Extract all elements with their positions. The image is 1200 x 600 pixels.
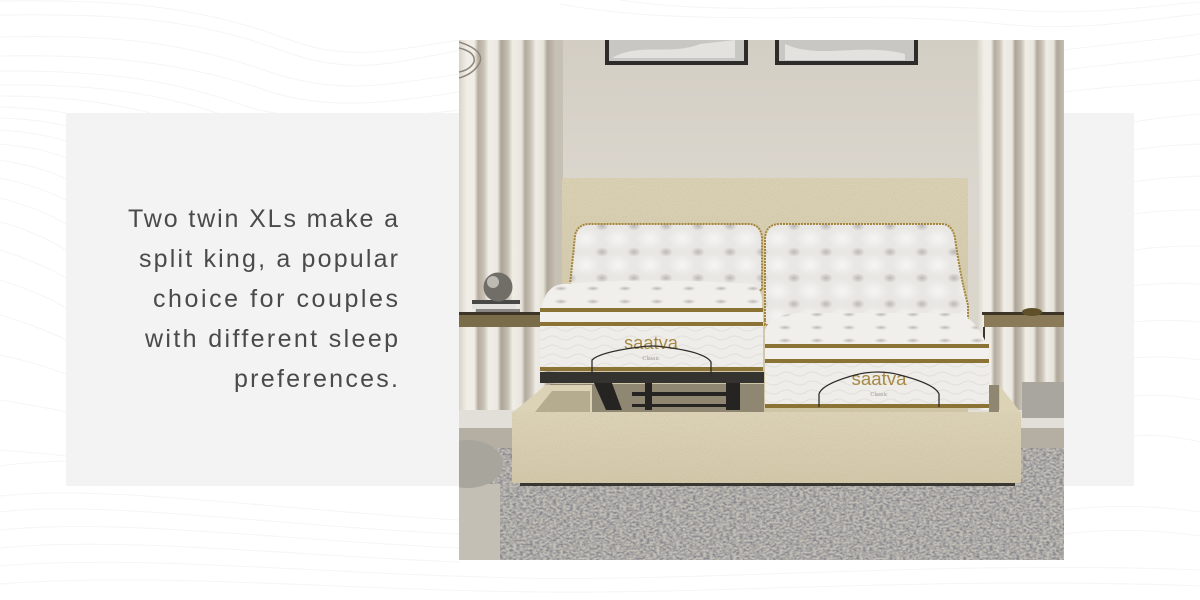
right mattress logo: saatva bbox=[852, 369, 908, 389]
right mattress handle bbox=[819, 372, 939, 407]
text block: split king caption: preferences. bbox=[234, 365, 398, 393]
text block: split king caption: choice for couples bbox=[153, 285, 398, 313]
wall bbox=[563, 40, 977, 410]
text block: split king caption: Two twin XLs make a bbox=[128, 205, 398, 233]
curtains bbox=[459, 40, 1064, 410]
left mattress bbox=[540, 224, 763, 376]
right mattress bbox=[765, 224, 989, 408]
framed pictures bbox=[605, 40, 918, 65]
right mattress body bbox=[765, 348, 985, 359]
text block: split king caption bbox=[128, 205, 398, 393]
bed frame bbox=[512, 385, 1021, 486]
text block: split king caption: split king, a popular bbox=[139, 245, 398, 273]
headboard bbox=[562, 178, 968, 420]
left mattress handle bbox=[592, 346, 711, 376]
left mattress raised head bbox=[570, 224, 762, 290]
baseboard and floor bbox=[459, 410, 1064, 450]
rug bbox=[459, 448, 1064, 560]
curtain tie detail bbox=[459, 42, 481, 78]
panel: grey text card bbox=[66, 113, 1134, 486]
photo: bedroom with split king adjustable bed bbox=[433, 40, 1064, 560]
left mattress: Classic bbox=[642, 356, 660, 362]
left mattress body bbox=[540, 312, 763, 327]
storage box bbox=[1022, 382, 1064, 418]
right mattress pillow top bbox=[765, 313, 987, 345]
right mattress raised head bbox=[765, 224, 968, 325]
left mattress pillow top bbox=[542, 280, 762, 308]
adjustable base frame under left mattress bbox=[540, 372, 764, 412]
right mattress: Classic bbox=[870, 392, 888, 398]
pouf and chair bbox=[459, 440, 503, 560]
left mattress logo: saatva bbox=[624, 333, 679, 353]
text block: split king caption: with different sleep bbox=[144, 325, 398, 353]
side table right with bowl bbox=[982, 308, 1064, 340]
side table left with sphere and books bbox=[459, 272, 540, 327]
